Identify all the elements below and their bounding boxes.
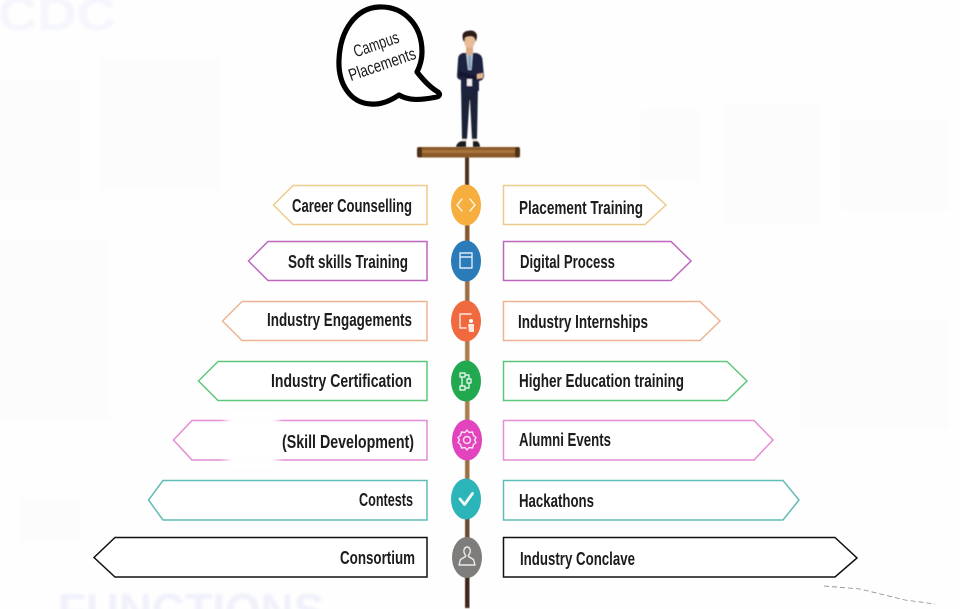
icon: gear	[452, 420, 482, 460]
right arrow: Hackathons	[504, 480, 799, 520]
right arrow: Industry Conclave	[504, 538, 857, 577]
right arrow: Placement Training	[504, 186, 666, 224]
speech bubble: Campus Placements	[339, 7, 439, 104]
right arrow: Digital Process: Digital Process	[520, 252, 615, 272]
left arrow: Industry Certification	[198, 362, 427, 400]
faded background texture	[0, 60, 950, 540]
id badge	[467, 79, 472, 86]
left arrow: Consortium	[94, 538, 427, 577]
icon: notebook	[451, 240, 481, 282]
crossed arms	[459, 71, 478, 80]
wooden plank platform	[417, 147, 520, 158]
right arrow: Hackathons: Hackathons	[519, 491, 594, 511]
right arrow: Higher Education training	[504, 362, 747, 400]
businessman figure	[456, 30, 484, 147]
row 2: Soft skills Training / Digital Process	[248, 240, 691, 282]
bubble outline	[339, 7, 439, 104]
icon: flow diagram	[451, 360, 481, 402]
right arrow: Placement Training: Placement Training	[519, 198, 643, 218]
left arrow: Soft skills Training: Soft skills Training	[288, 252, 408, 272]
icon: check mark	[451, 478, 481, 520]
stray dashed mark at lower right	[824, 586, 935, 604]
right arrow: Alumni Events	[504, 420, 773, 460]
row 4: Industry Certification / Higher Education training	[198, 360, 747, 402]
row 7: Consortium / Industry Conclave	[94, 537, 857, 578]
right arrow: Higher Education training: Higher Education training	[519, 371, 684, 391]
left arrow: Soft skills Training	[248, 242, 427, 280]
right arrow: Industry Conclave: Industry Conclave	[520, 549, 635, 569]
left arrow: Industry Certification: Industry Certification	[271, 371, 412, 391]
row 5: Skill Development / Alumni Events	[174, 412, 773, 468]
icon: presenter at board	[451, 300, 481, 342]
left arrow: Industry Engagements	[222, 302, 427, 340]
icon: code brackets	[451, 184, 481, 226]
neck and face	[466, 46, 473, 56]
left arrow: Industry Engagements: Industry Engagements	[267, 310, 412, 330]
right arrow: Digital Process	[504, 242, 691, 280]
row 6: Contests / Hackathons	[148, 478, 799, 520]
left arrow: Consortium: Consortium	[340, 548, 415, 568]
left arrow: Skill Development: (Skill Development)	[282, 432, 414, 452]
icon: person	[452, 537, 482, 578]
right arrow: Alumni Events: Alumni Events	[519, 430, 611, 450]
left arrow: Career Counselling: Career Counselling	[292, 196, 412, 216]
left arrow: Contests: Contests	[359, 490, 413, 510]
left arrow: Contests	[148, 480, 427, 520]
hair	[462, 30, 477, 42]
row 1: Career Counselling / Placement Training	[274, 184, 666, 226]
shoes	[456, 141, 480, 147]
jacket	[457, 53, 484, 91]
speech bubble: Campus Placements: Placements	[346, 44, 418, 85]
bubble text: Campus	[351, 28, 401, 61]
white smudge over arrow	[226, 412, 278, 468]
left arrow: Skill Development	[174, 412, 427, 468]
shirt and tie	[466, 52, 473, 70]
legs	[461, 85, 478, 139]
central wooden pole	[465, 150, 470, 608]
right arrow: Industry Internships: Industry Internships	[518, 312, 648, 332]
right arrow: Industry Internships	[504, 302, 720, 340]
left arrow: Career Counselling	[274, 186, 427, 224]
row 3: Industry Engagements / Industry Internships	[222, 300, 720, 342]
